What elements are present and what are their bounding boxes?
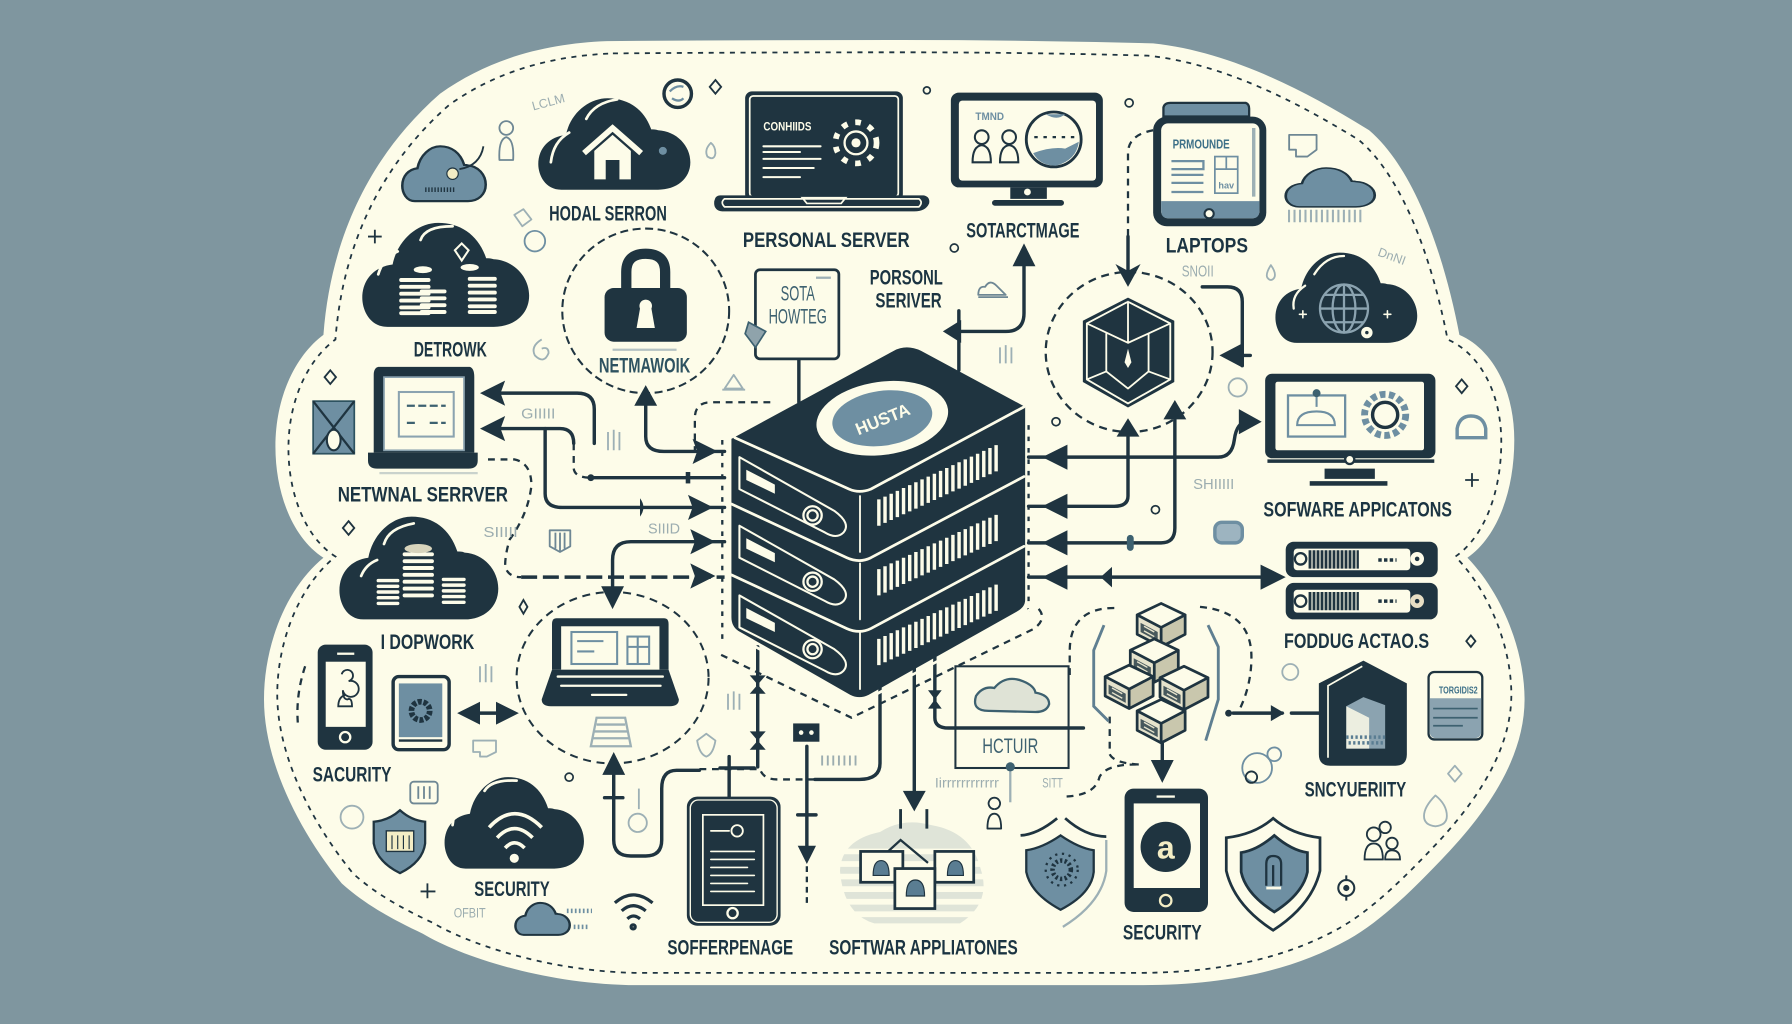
label: PORSONL	[870, 265, 943, 290]
icon: house cloud	[538, 98, 690, 190]
panel: sota hosting box	[745, 270, 839, 359]
arrow: server to lower branch	[545, 429, 725, 520]
icon: software monitor	[1265, 374, 1435, 486]
label: SERIVER	[875, 287, 942, 312]
panel: hctuir box	[955, 666, 1069, 771]
noise labels: DnNI	[1376, 245, 1408, 268]
panel: sota hosting box: SOTA	[781, 281, 815, 306]
icon: laptops tablet: hav	[1218, 181, 1235, 191]
icon: coin cloud	[362, 223, 529, 327]
plus marks	[368, 230, 1479, 898]
icon: secure house	[1319, 661, 1407, 766]
icon: personal server laptop	[714, 91, 929, 211]
central server stack	[728, 347, 1032, 699]
label: HODAL SERRON	[549, 201, 667, 226]
small rings	[565, 87, 1159, 781]
noise labels: IIIIIII	[819, 754, 858, 770]
glyph marks	[480, 345, 1011, 710]
icon: central-left laptop in ring	[517, 592, 709, 763]
label: SOFWARE APPICATONS	[1263, 497, 1452, 522]
panel: hctuir box: HCTUIR	[982, 733, 1038, 758]
arrow: to network laptop 1	[480, 381, 594, 443]
icon: dots box	[793, 723, 819, 742]
label: SOFFERPENAGE	[667, 934, 793, 959]
icon: person outline	[499, 121, 513, 160]
noise labels: SIIIII	[483, 525, 518, 541]
noise labels: OFBIT	[454, 906, 486, 921]
noise labels: LCLM	[530, 91, 566, 113]
label: NETWNAL SERRVER	[338, 482, 508, 507]
icon: laptops tablet	[1153, 103, 1266, 226]
host badge: HUSTA	[852, 399, 913, 439]
icon: security phone: a	[1157, 829, 1175, 865]
icon: sotarctmage monitor	[951, 93, 1103, 206]
icon: envelope	[313, 401, 354, 454]
noise labels: SNOII	[1182, 264, 1214, 281]
panel: sota hosting box: HOWTEG	[769, 303, 827, 328]
dashed arc near phone	[297, 666, 305, 728]
arrow: up to cube 1	[1029, 418, 1139, 519]
cube	[1137, 699, 1185, 743]
arrow: cluster to device	[1225, 705, 1320, 721]
arrow: dots box down	[798, 746, 816, 905]
label: PERSONAL SERVER	[743, 227, 910, 252]
server body	[731, 347, 1025, 697]
cube	[1105, 665, 1153, 709]
icon: security phone	[1125, 789, 1208, 912]
dashed connector	[695, 402, 770, 450]
cube	[1137, 603, 1185, 647]
icon: network laptop	[368, 367, 478, 473]
status lights	[803, 506, 822, 658]
label: LAPTOPS	[1166, 233, 1248, 258]
connector: person line	[1009, 768, 1011, 802]
label: SNCYUERIITY	[1305, 777, 1407, 802]
icon: phone	[318, 645, 373, 750]
server outlines	[728, 407, 1032, 699]
cube	[1160, 666, 1208, 710]
icon: ring	[664, 80, 691, 107]
label: SOFTWAR APPLIATONES	[829, 934, 1018, 959]
arrow: server to rack	[1029, 565, 1286, 590]
connector: bowtie to hctuir	[928, 654, 1083, 728]
connector network	[457, 130, 1320, 905]
icon: note card	[1429, 672, 1482, 739]
label: I DOPWORK	[381, 629, 475, 654]
arrow: cluster down to phone	[1151, 738, 1174, 783]
arrow: up to sota box	[787, 331, 810, 402]
noise labels: SIIID	[648, 522, 680, 538]
icon: wifi	[615, 895, 653, 929]
arrow: server to software monitor	[1029, 409, 1262, 470]
arrow: dashed to server	[521, 563, 725, 589]
label: SECURITY	[1123, 919, 1202, 944]
icon: small blue pill	[1215, 522, 1242, 543]
icon: globe cloud	[1275, 253, 1417, 343]
noise labels: Iirrrrrrrrrrrr	[935, 775, 999, 790]
label: SOTARCTMAGE	[966, 218, 1079, 243]
icon: shield gear	[1021, 818, 1106, 927]
icon: shield fingerprint	[1226, 818, 1320, 930]
label: NETMAWOIK	[599, 353, 691, 378]
icon: laptops tablet: PRMOUNDE	[1173, 138, 1230, 152]
dashed: around cluster right	[1200, 607, 1251, 711]
icon: coin cloud 2	[339, 517, 498, 619]
icon: server cube cluster	[1094, 603, 1218, 743]
arrow: bottom up loop	[602, 681, 880, 856]
icon: people	[1365, 822, 1400, 859]
icon: small stack	[591, 718, 631, 746]
noise labels: SHIIIII	[1193, 477, 1234, 493]
icon: tablet document	[687, 797, 781, 926]
dashed: around cluster left	[1070, 608, 1114, 677]
cube	[1130, 639, 1178, 682]
icon: wifi cloud	[445, 777, 584, 869]
icon: note card: TORGIDIS2	[1439, 686, 1478, 697]
small decorative icons	[325, 80, 1479, 921]
icon: shield left	[374, 810, 425, 873]
host badge	[812, 373, 953, 464]
double arrow	[457, 702, 519, 725]
dashed vertical left of server	[721, 440, 723, 640]
label: SACURITY	[313, 762, 392, 787]
label: SECURITY	[474, 876, 550, 901]
arrow: up to sotarctmage	[943, 243, 1035, 370]
noise labels	[454, 91, 1408, 921]
arrow: down to laptop	[601, 529, 725, 609]
label	[870, 265, 943, 312]
panel: cream cloud backdrop	[264, 40, 1525, 985]
icon: small blue cloud	[515, 903, 592, 935]
vents	[879, 445, 996, 665]
arrow: bracket to cube	[1202, 287, 1250, 367]
icon: blue cloud top left	[402, 146, 486, 201]
icon: personal server laptop: CONHIIDS	[763, 119, 811, 133]
noise labels: SITT	[1042, 775, 1063, 790]
dashed: around cluster bottom	[1062, 717, 1141, 797]
icon: blue tablet	[393, 677, 449, 750]
icon: target	[1338, 875, 1354, 901]
grey outline icons	[341, 135, 1462, 832]
connector: tablet line	[728, 757, 731, 797]
icon: hex cube in dashed ring	[1046, 272, 1213, 432]
arrow: to network laptop 2	[480, 416, 725, 483]
drive bays	[746, 470, 775, 632]
arrow: up to netmawoik	[634, 385, 725, 464]
icon: padlock in dashed ring	[562, 229, 729, 393]
dashed connector left	[488, 459, 531, 577]
label: DETROWK	[414, 337, 487, 362]
arrow: up to cube 2	[1029, 400, 1186, 555]
dashed: under server	[721, 606, 1042, 718]
noise labels: GIIIII	[521, 406, 555, 422]
dashed vertical right of server	[1028, 425, 1030, 611]
icon: blue cloud top right	[1286, 168, 1375, 216]
icon: half circle badge	[1457, 416, 1486, 438]
icon: sotarctmage monitor: TMND	[975, 111, 1004, 123]
arrow: laptops to cube	[1115, 130, 1153, 287]
label: FODDUG ACTAO.S	[1284, 628, 1429, 653]
icon: appliance stripes cloud	[834, 809, 994, 923]
diamonds	[325, 80, 1475, 647]
arrow: server to appliatones	[903, 657, 926, 811]
arrow: vertical with bowties	[750, 647, 766, 767]
icon: rack servers	[1286, 542, 1438, 619]
